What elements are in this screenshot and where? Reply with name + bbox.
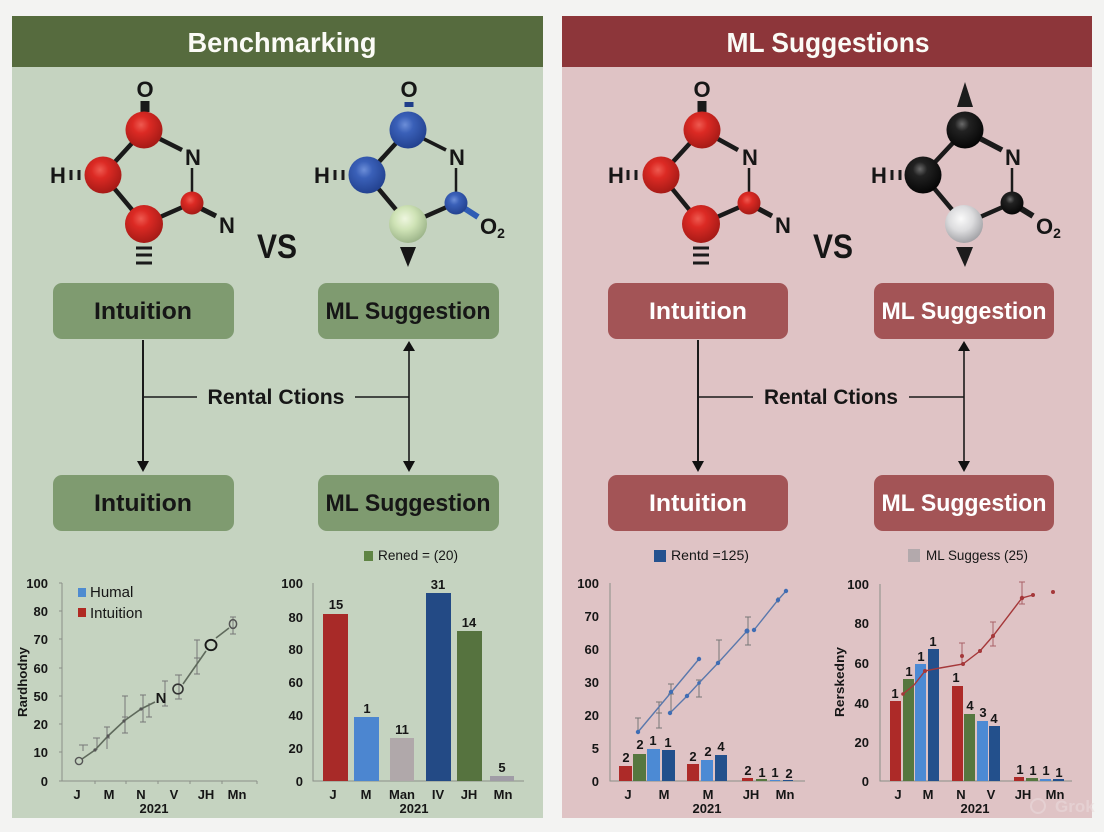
- combo chart: Rentd: 2: [785, 766, 793, 781]
- line chart: Humal and Intuition: N: [136, 787, 146, 802]
- box: Intuition top: Intuition: [649, 298, 747, 325]
- combo chart: ML Suggess: 1: [1042, 763, 1050, 778]
- connector label: Rental Ctions: Rental Ctions: [764, 386, 898, 409]
- line chart: Humal and Intuition: [15, 576, 257, 816]
- combo chart: ML Suggess: 60: [855, 656, 869, 671]
- molecule: red intuition structure: O: [136, 77, 154, 102]
- combo chart: Rentd: 2: [689, 749, 697, 764]
- box: ML Suggestion top: [318, 283, 499, 339]
- line chart: Humal and Intuition: Rardhodny: [15, 646, 30, 717]
- bar chart: Rened: 0: [296, 774, 303, 789]
- box: Intuition bottom: [608, 475, 788, 531]
- heading: Benchmarking: [12, 16, 543, 67]
- combo chart: Rentd: 60: [585, 642, 599, 657]
- molecule: black ML structure: N: [1005, 145, 1021, 170]
- combo chart: Rentd: 4: [717, 739, 725, 754]
- combo chart: ML Suggess: 20: [855, 735, 869, 750]
- combo chart: Rentd: JH: [743, 787, 759, 802]
- molecule: blue ML structure: O: [480, 214, 497, 239]
- line chart: Humal and Intuition: 100: [26, 576, 48, 591]
- bar chart: Rened: 14: [462, 615, 477, 630]
- molecule: blue ML structure: 2: [497, 225, 505, 241]
- combo chart: Rentd: 30: [585, 675, 599, 690]
- arrow: ML Suggestion double headed: [403, 341, 415, 472]
- heading: Benchmarking: Benchmarking: [188, 27, 376, 58]
- box: Intuition bottom: [53, 475, 234, 531]
- box: ML Suggestion top: [874, 283, 1054, 339]
- molecule: red intuition structure: O: [693, 77, 711, 102]
- bar chart: Rened: Rened = (20): [378, 547, 458, 563]
- combo chart: Rentd: J: [624, 787, 632, 802]
- molecule: black ML structure: H: [871, 163, 887, 188]
- molecule: black ML structure: O: [1036, 214, 1053, 239]
- combo chart: Rentd: M: [703, 787, 713, 802]
- combo chart: ML Suggess: 1: [1055, 765, 1063, 780]
- line chart: Humal and Intuition: M: [104, 787, 114, 802]
- box: Intuition top: [53, 283, 234, 339]
- combo chart: ML Suggess: Mn: [1046, 787, 1064, 802]
- combo chart: ML Suggess: 1: [929, 634, 937, 649]
- combo chart: Rentd: [577, 547, 805, 816]
- bar chart: Rened: Mn: [494, 787, 512, 802]
- bar chart: Rened: 2021: [400, 801, 428, 816]
- molecule: blue ML structure: H: [314, 163, 330, 188]
- combo chart: ML Suggess: 1: [952, 670, 960, 685]
- combo chart: ML Suggess: 1: [891, 686, 899, 701]
- line chart: Humal and Intuition: JH: [198, 787, 214, 802]
- molecule: red intuition structure: [50, 77, 235, 263]
- panel: Benchmarking: [12, 16, 543, 818]
- line chart: Humal and Intuition: 0: [41, 774, 48, 789]
- combo chart: ML Suggess: J: [894, 787, 902, 802]
- combo chart: Rentd: 2: [636, 737, 644, 752]
- line chart: Humal and Intuition: J: [73, 787, 81, 802]
- combo chart: Rentd: 2: [622, 750, 630, 765]
- arrow: ML Suggestion double headed: [958, 341, 970, 472]
- molecule: blue ML structure: [314, 77, 505, 267]
- box: ML Suggestion top: ML Suggestion: [882, 298, 1046, 325]
- label: VS: VS: [813, 228, 853, 266]
- bar chart: Rened: 1: [363, 701, 371, 716]
- combo chart: Rentd: 5: [592, 741, 599, 756]
- line chart: Humal and Intuition: V: [170, 787, 179, 802]
- combo chart: ML Suggess: 4: [990, 711, 998, 726]
- line chart: Humal and Intuition: 70: [34, 632, 48, 647]
- box: ML Suggestion top: ML Suggestion: [326, 298, 490, 325]
- combo chart: ML Suggess: Rerskedny: [832, 646, 847, 717]
- panel: ML Suggestions: [562, 16, 1095, 818]
- line chart: Humal and Intuition: 10: [34, 745, 48, 760]
- combo chart: Rentd: 100: [577, 576, 599, 591]
- bar chart: Rened: 31: [431, 577, 445, 592]
- label: VS: VS: [257, 228, 297, 266]
- box: Intuition bottom: Intuition: [649, 490, 747, 517]
- combo chart: Rentd: 2: [744, 763, 752, 778]
- molecule: red intuition structure: N: [185, 145, 201, 170]
- bar chart: Rened: IV: [432, 787, 444, 802]
- molecule: red intuition structure: N: [219, 213, 235, 238]
- bar chart: Rened: 40: [289, 708, 303, 723]
- box: Intuition top: [608, 283, 788, 339]
- bar chart: Rened: 15: [329, 597, 343, 612]
- combo chart: ML Suggess: 0: [862, 774, 869, 789]
- bar chart: Rened: 11: [395, 722, 409, 737]
- molecule: blue ML structure: N: [449, 145, 465, 170]
- combo chart: ML Suggess: ML Suggess (25): [926, 547, 1028, 563]
- combo chart: ML Suggess: 1: [1029, 763, 1037, 778]
- box: Intuition top: Intuition: [94, 298, 192, 325]
- bar chart: Rened: 100: [281, 576, 303, 591]
- combo chart: Rentd: 2021: [693, 801, 721, 816]
- combo chart: Rentd: 1: [664, 735, 672, 750]
- molecule: red intuition structure: H: [50, 163, 66, 188]
- bar chart: Rened: 80: [289, 642, 303, 657]
- line chart: Humal and Intuition: 80: [34, 604, 48, 619]
- combo chart: Rentd: 1: [771, 765, 779, 780]
- combo chart: Rentd: Mn: [776, 787, 794, 802]
- combo chart: Rentd: 1: [758, 765, 766, 780]
- line chart: Humal and Intuition: 50: [34, 689, 48, 704]
- combo chart: ML Suggess: 1: [905, 664, 913, 679]
- line chart: Humal and Intuition: 2021: [140, 801, 168, 816]
- combo chart: Rentd: 0: [592, 774, 599, 789]
- combo chart: Rentd: M: [659, 787, 669, 802]
- bar chart: Rened: J: [329, 787, 337, 802]
- line chart: Humal and Intuition: Mn: [228, 787, 246, 802]
- combo chart: Rentd: 20: [585, 708, 599, 723]
- heading: ML Suggestions: [562, 16, 1092, 67]
- box: ML Suggestion bottom: ML Suggestion: [882, 490, 1046, 517]
- molecule: red intuition structure: H: [608, 163, 624, 188]
- molecule: blue ML structure: O: [400, 77, 418, 102]
- bar chart: Rened: M: [361, 787, 371, 802]
- watermark: Grok: [1031, 797, 1095, 816]
- molecule: red intuition structure: [608, 77, 791, 263]
- box: ML Suggestion bottom: ML Suggestion: [326, 490, 490, 517]
- molecule: red intuition structure: N: [742, 145, 758, 170]
- combo chart: ML Suggess: 100: [847, 577, 869, 592]
- combo chart: ML Suggess: 2021: [961, 801, 989, 816]
- combo chart: Rentd: Rentd =125): [671, 547, 749, 563]
- combo chart: ML Suggess: JH: [1015, 787, 1031, 802]
- box: ML Suggestion bottom: [318, 475, 499, 531]
- bar chart: Rened: [281, 547, 524, 816]
- combo chart: Rentd: 2: [704, 744, 712, 759]
- combo chart: Rentd: 70: [585, 609, 599, 624]
- combo chart: ML Suggess: [832, 547, 1072, 816]
- bar chart: Rened: 20: [289, 741, 303, 756]
- bar chart: Rened: 80: [289, 610, 303, 625]
- combo chart: ML Suggess: 80: [855, 616, 869, 631]
- arrow: Intuition down: [692, 340, 704, 472]
- molecule: black ML structure: 2: [1053, 225, 1061, 241]
- heading: ML Suggestions: ML Suggestions: [726, 27, 930, 58]
- connector label: Rental Ctions: Rental Ctions: [208, 386, 344, 409]
- line chart: Humal and Intuition: N: [156, 690, 166, 707]
- bar chart: Rened: JH: [461, 787, 477, 802]
- box: Intuition bottom: Intuition: [94, 490, 192, 517]
- combo chart: ML Suggess: N: [956, 787, 966, 802]
- line chart: Humal and Intuition: Intuition: [90, 605, 143, 622]
- bar chart: Rened: 5: [498, 760, 506, 775]
- combo chart: ML Suggess: 3: [979, 705, 987, 720]
- combo chart: ML Suggess: 4: [966, 698, 974, 713]
- combo chart: ML Suggess: 1: [917, 649, 925, 664]
- combo chart: ML Suggess: M: [923, 787, 933, 802]
- bar chart: Rened: Man: [389, 787, 415, 802]
- arrow: Intuition down: [137, 340, 149, 472]
- combo chart: ML Suggess: 40: [855, 696, 869, 711]
- line chart: Humal and Intuition: Humal: [90, 584, 133, 601]
- combo chart: ML Suggess: V: [987, 787, 996, 802]
- combo chart: ML Suggess: 1: [1016, 762, 1024, 777]
- watermark: Grok: Grok: [1055, 797, 1095, 816]
- molecule: red intuition structure: N: [775, 213, 791, 238]
- line chart: Humal and Intuition: 20: [34, 717, 48, 732]
- bar chart: Rened: 60: [289, 675, 303, 690]
- combo chart: Rentd: 1: [649, 733, 657, 748]
- molecule: black ML structure: [871, 82, 1061, 267]
- box: ML Suggestion bottom: [874, 475, 1054, 531]
- line chart: Humal and Intuition: 60: [34, 661, 48, 676]
